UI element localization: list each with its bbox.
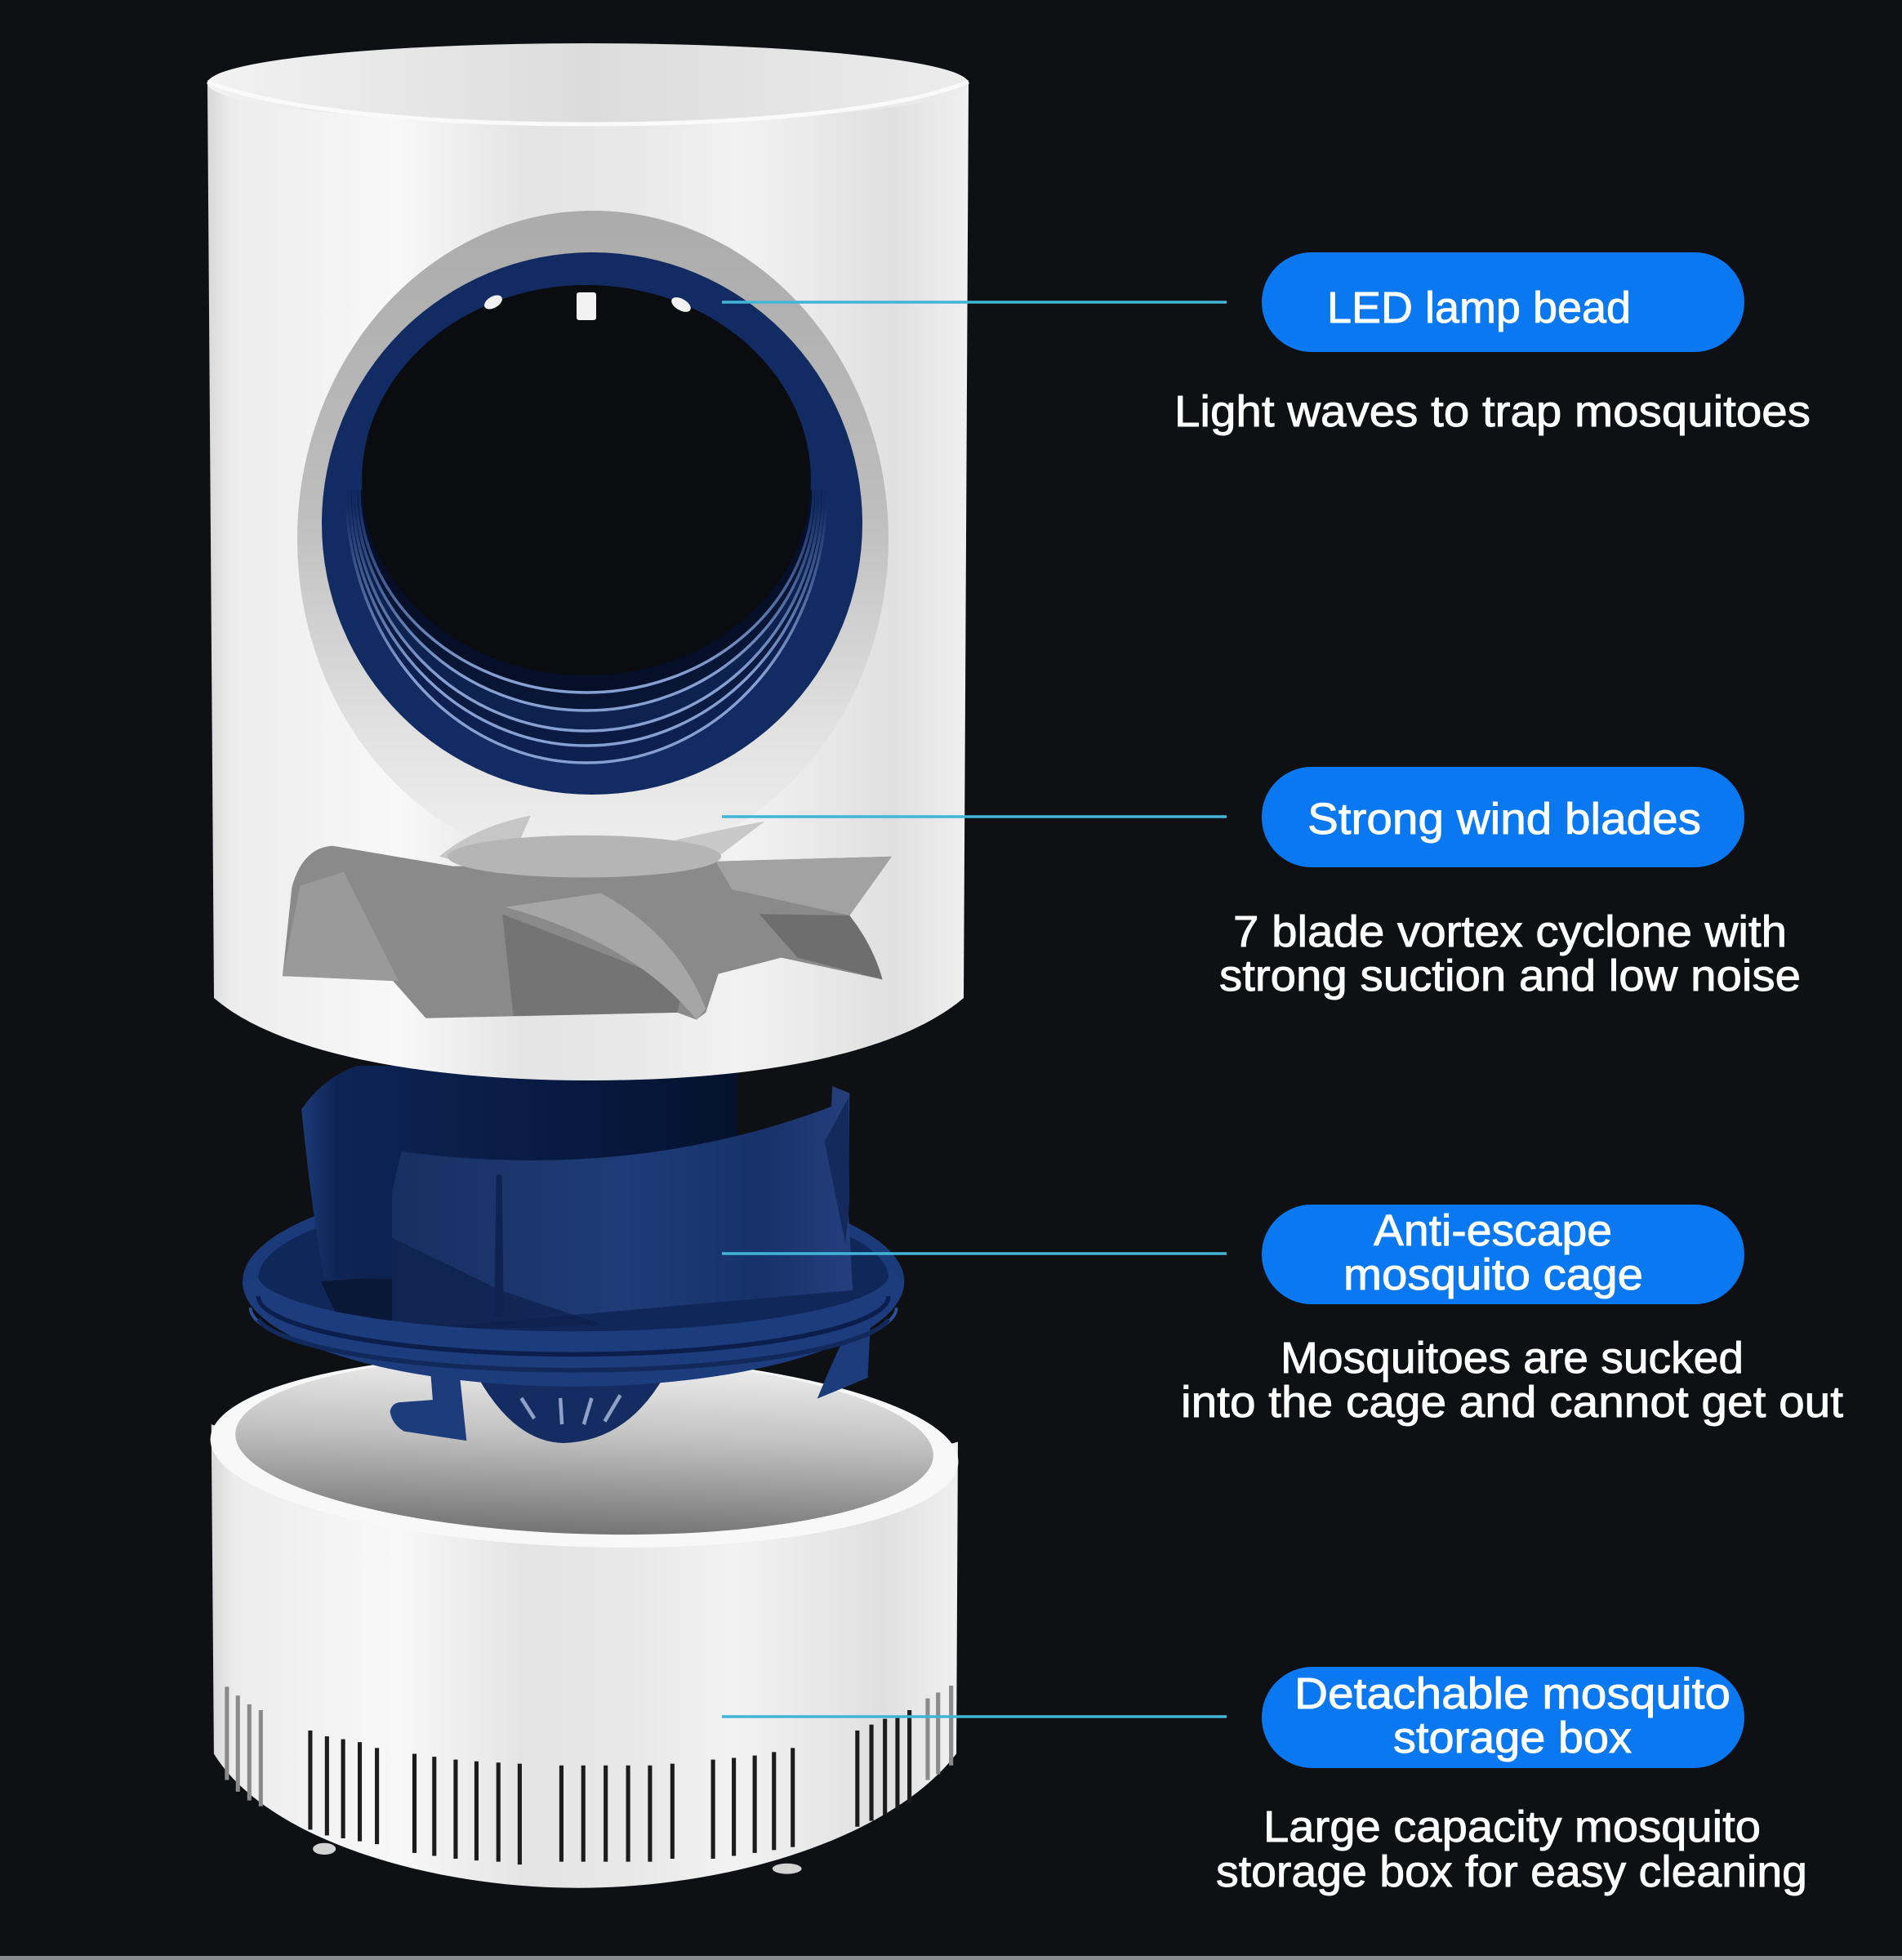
description: storage box: storage box for easy cleaning (1216, 1847, 1807, 1896)
description: LED lamp bead: Light waves to trap mosquitoes (1174, 387, 1811, 436)
product: anti-escape cage (243, 1066, 904, 1443)
product: top housing (207, 43, 969, 1080)
callout: LED lamp bead (1262, 252, 1744, 352)
blue intake ring (322, 252, 862, 795)
description: storage box: Large capacity mosquito (1263, 1802, 1761, 1851)
callout: strong wind blades (1262, 767, 1744, 867)
vent slots (227, 1686, 951, 1864)
callout: anti-escape mosquito cage: Anti-escape (1374, 1206, 1612, 1255)
grey opening surround (297, 211, 889, 867)
callout: detachable storage box (1262, 1667, 1744, 1768)
product: storage box base (208, 1343, 960, 1888)
description: wind blades (1219, 907, 1801, 1000)
callout: detachable storage box: storage box (1393, 1713, 1632, 1762)
top cap (207, 43, 969, 123)
description: cage: Mosquitoes are sucked (1281, 1334, 1744, 1383)
intake ribs (346, 490, 826, 763)
callout: strong wind blades: Strong wind blades (1307, 795, 1701, 844)
front wall (392, 1086, 853, 1331)
callout: LED lamp bead: LED lamp bead (1327, 283, 1631, 332)
callout: detachable storage box: Detachable mosquito (1294, 1669, 1731, 1718)
description: storage box (1216, 1802, 1807, 1896)
description: wind blades: 7 blade vortex cyclone with (1233, 907, 1787, 956)
funnel (472, 1366, 670, 1443)
description: cage (1181, 1334, 1843, 1427)
callout: anti-escape mosquito cage (1262, 1205, 1744, 1304)
description: wind blades: strong suction and low noise (1219, 951, 1801, 1000)
callout: anti-escape mosquito cage: mosquito cage (1343, 1250, 1643, 1299)
fan blades (283, 816, 892, 1019)
back wall (301, 1066, 737, 1279)
feet (313, 1843, 336, 1855)
LED beads (482, 292, 693, 320)
description: cage: into the cage and cannot get out (1181, 1378, 1843, 1427)
front ring band (243, 1267, 904, 1387)
dark interior (362, 285, 811, 675)
leader lines (722, 302, 1227, 1717)
clips (390, 1366, 466, 1441)
rim and well (208, 1343, 960, 1558)
ring tray (243, 1177, 904, 1387)
